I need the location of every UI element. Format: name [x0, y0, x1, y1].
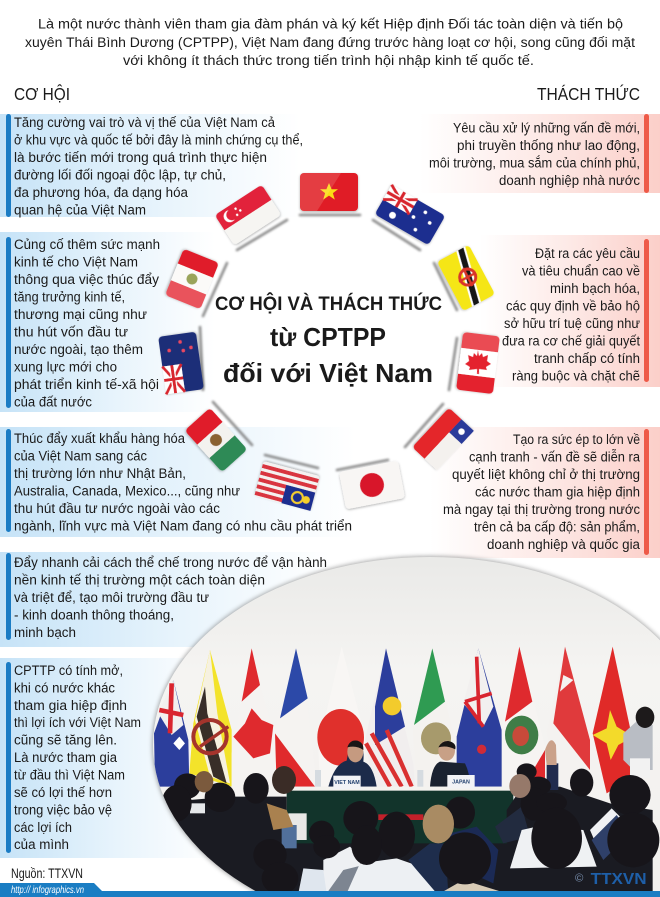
centre title: CƠ HỘI VÀ THÁCH THỨC: [215, 293, 442, 315]
panel: opportunity 5: Là nước tham gia: [14, 750, 117, 765]
panel: opportunity 3: của Việt Nam sang các: [14, 448, 147, 464]
panel: challenge 2: các quy định về bảo hộ: [506, 298, 640, 314]
flag: Vietnam: [300, 173, 358, 211]
intro paragraph: với không ít thách thức trong tiến trình hội nhập kinh tế quốc tế.: [123, 53, 534, 68]
panel: opportunity 1: ở khu vực và quốc tế bởi đây là minh chứng cụ thể,: [14, 132, 303, 148]
panel: opportunity 5: trong việc bảo vệ: [14, 802, 112, 818]
flag: Peru: [165, 249, 219, 309]
panel: opportunity 2: Củng cố thêm sức mạnh: [14, 237, 160, 252]
panel: opportunity 3: thị trường lớn như Nhật Bản,: [14, 466, 186, 481]
panel: challenge 2: ràng buộc và chặt chẽ: [512, 368, 640, 384]
panel: opportunity 2: xung lực mới cho: [14, 360, 117, 374]
panel: opportunity 4: minh bạch: [14, 625, 76, 640]
logo: TTXVN watermark: [575, 873, 646, 884]
flag: Brunei: [437, 245, 495, 311]
centre title: từ CPTPP: [270, 322, 386, 352]
panel: opportunity 2: phát triển kinh tế-xã hội: [14, 377, 159, 392]
panel: opportunity 2: tăng trưởng kinh tế,: [14, 290, 125, 304]
panel: opportunity 2: thu hút vốn đầu tư: [14, 324, 128, 340]
panel: challenge 2: và tiêu chuẩn cao về: [522, 264, 640, 278]
logo: TTXVN watermark: TTXVN: [591, 871, 647, 888]
flag: Australia: [375, 185, 445, 245]
centre title: đối với Việt Nam: [223, 358, 433, 388]
flag: New Zealand: [158, 332, 204, 394]
flag: Chile: [412, 408, 474, 470]
panel: opportunity 2: [0, 232, 215, 412]
panel: opportunity 3: Australia, Canada, Mexico..., cũng như: [14, 484, 240, 498]
intro paragraph: xuyên Thái Bình Dương (CPTPP), Việt Nam đang đứng trước hàng loạt cơ hội, song cũng đối mặt: [25, 35, 635, 50]
logo: TTXVN watermark: ©: [575, 873, 584, 885]
flag: Malaysia: [254, 461, 320, 511]
intro paragraph: [25, 16, 635, 68]
panel: challenge 2: đưa ra cơ chế giải quyết: [502, 334, 640, 348]
panel: opportunity 3: ngành, lĩnh vực mà Việt Nam đang có nhu cầu phát triển: [14, 518, 352, 534]
panel: challenge 2: tranh chấp có tính: [534, 351, 640, 366]
photo: table and delegates: [270, 740, 513, 844]
panel: opportunity 1: là bước tiến mới trong quá trình thực hiện: [14, 150, 267, 165]
panel: opportunity 5: [0, 658, 215, 858]
panel: challenge 3: các nước tham gia hiệp định: [475, 484, 640, 500]
panel: opportunity 5: các lợi ích: [14, 820, 72, 835]
panel: opportunity 3: Thúc đẩy xuất khẩu hàng hóa: [14, 431, 185, 446]
panel: opportunity 5: từ đầu thì Việt Nam: [14, 768, 125, 782]
footer band with website: [0, 883, 660, 897]
panel: challenge 2: minh bạch hóa,: [550, 281, 640, 296]
panel: challenge 2: sở hữu trí tuệ cũng như: [504, 316, 640, 331]
flag: Mexico: [185, 408, 247, 472]
panel: opportunity 2: thương mại cũng như: [14, 307, 147, 322]
panel: challenge 3: Tạo ra sức ép to lớn về: [513, 432, 640, 447]
panel: challenge 1: môi trường, mua sắm của chính phủ,: [429, 156, 640, 170]
photo: audience: [150, 740, 659, 897]
panel: opportunity 2: thông qua việc thúc đẩy: [14, 272, 159, 287]
panel: opportunity 2: nước ngoài, tạo thêm: [14, 342, 143, 357]
panel: opportunity 5: cũng sẽ tăng lên.: [14, 732, 117, 748]
panel: challenge 1: phi truyền thống như lao động,: [457, 138, 640, 153]
panel: challenge 1: Yêu cầu xử lý những vấn đề mới,: [453, 120, 640, 136]
photo: table and delegates: VIET NAM: [334, 780, 360, 786]
panel: opportunity 3: thu hút đầu tư nước ngoài vào các: [14, 501, 220, 516]
panel: challenge 1: doanh nghiệp nhà nước: [499, 173, 640, 188]
panel: opportunity 5: của mình: [14, 837, 69, 852]
panel: opportunity 1: quan hệ của Việt Nam: [14, 202, 146, 218]
panel: opportunity 4: - kinh doanh thông thoáng,: [14, 608, 174, 622]
panel: opportunity 2: của đất nước: [14, 394, 92, 410]
panel: opportunity 5: CPTTP có tính mở,: [14, 663, 123, 678]
panel: opportunity 1: [0, 114, 303, 218]
panel: opportunity 1: đa phương hóa, đa dạng hóa: [14, 185, 188, 200]
panel: opportunity 5: thì lợi ích với Việt Nam: [14, 715, 141, 730]
photo: table and delegates: JAPAN: [452, 779, 470, 785]
photo: press conference in elliptical frame: [140, 550, 660, 897]
panel: challenge 3: [430, 427, 660, 558]
panel: opportunity 4: nền kinh tế thị trường một cách toàn diện: [14, 572, 265, 588]
footer band with website: http:// infographics.vn: [11, 884, 84, 896]
centre title: [215, 293, 442, 388]
heading: challenges: THÁCH THỨC: [537, 83, 640, 104]
panel: opportunity 5: khi có nước khác: [14, 680, 115, 696]
flag: Canada: [456, 332, 500, 394]
panel: opportunity 1: Tăng cường vai trò và vị thế của Việt Nam cả: [14, 115, 275, 130]
panel: challenge 1: [420, 114, 660, 193]
panel: opportunity 4: [0, 552, 330, 647]
panel: opportunity 4: Đẩy nhanh cải cách thể chế trong nước để vận hành: [14, 555, 327, 570]
panel: opportunity 2: kinh tế cho Việt Nam: [14, 254, 138, 270]
panel: challenge 3: trên cả ba cấp độ: sản phẩm,: [474, 520, 640, 534]
flag ring: [158, 173, 500, 511]
source note: Nguồn: TTXVN: [11, 866, 83, 881]
panel: opportunity 5: sẽ có lợi thế hơn: [14, 785, 112, 800]
panel: challenge 3: quyết liệt không chỉ ở thị trường: [452, 467, 640, 482]
flag: Japan: [339, 461, 405, 509]
intro paragraph: Là một nước thành viên tham gia đàm phán và ký kết Hiệp định Đối tác toàn diện và tiến bộ: [38, 16, 623, 32]
panel: challenge 3: cạnh tranh - vấn đề sẽ diễn ra: [469, 450, 640, 464]
panel: opportunity 3: [0, 427, 355, 537]
photo: interpreter: [623, 707, 654, 778]
panel: opportunity 1: đường lối đối ngoại độc lập, tự chủ,: [14, 168, 226, 182]
panel: challenge 3: mà ngay tại thị trường trong nước: [443, 502, 640, 517]
panel: challenge 2: Đặt ra các yêu cầu: [535, 246, 640, 261]
panel: challenge 2: [480, 235, 660, 387]
panel: challenge 3: doanh nghiệp và quốc gia: [487, 537, 640, 552]
heading: opportunities: CƠ HỘI: [14, 83, 70, 104]
panel: opportunity 4: và triệt để, tạo môi trường đầu tư: [14, 590, 209, 605]
flag: Singapore: [215, 185, 281, 245]
panel: opportunity 5: tham gia hiệp định: [14, 698, 127, 713]
photo flags: [154, 647, 633, 803]
